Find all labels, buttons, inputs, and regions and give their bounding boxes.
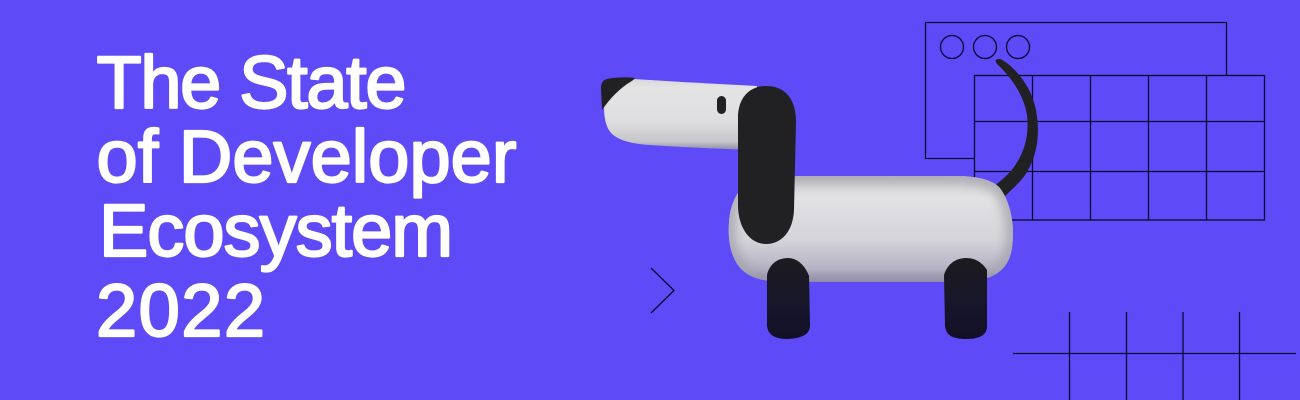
icon: window control circles [940,36,1030,58]
title: 2022 [96,269,265,352]
illustration: dog [601,59,1038,339]
title: The State [96,41,406,124]
icon: crosshatch lines bottom right [1013,312,1296,400]
dog head [604,79,757,150]
dog nose [601,77,635,110]
icon: browser window outline [926,22,1226,158]
title: of Developer [96,115,516,198]
dog body [725,174,1017,284]
title: Ecosystem [99,189,453,272]
dog eye [717,96,726,114]
dog tail [990,59,1038,196]
dog front leg [767,258,810,339]
title [96,41,516,352]
icon: chevron arrow [651,268,674,313]
icon: table grid [974,76,1264,220]
dog back leg [944,258,987,339]
dog ear [738,86,796,244]
